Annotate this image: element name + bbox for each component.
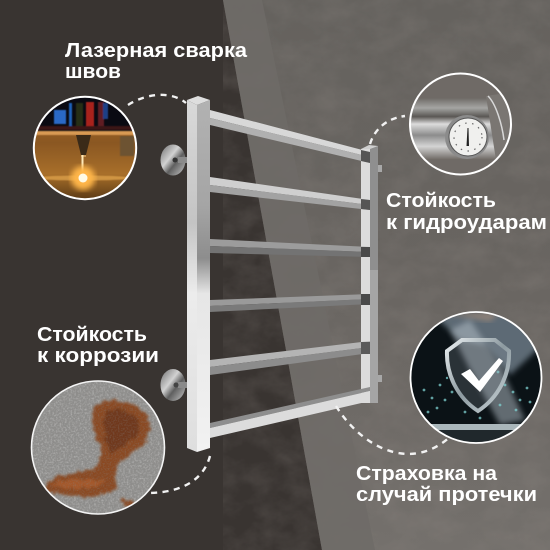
left post [187,96,210,452]
connector: leak insurance [336,406,452,454]
photo circle: gauge on pipe [410,73,512,175]
label: laser welding: Лазерная сварка [65,40,248,62]
wall mount: right studs [377,165,382,382]
rail 6 [210,387,370,438]
label: water hammer resistance: к гидроударам [386,212,547,234]
label: leak insurance: Страховка на [356,463,498,485]
rail 5 [210,341,370,375]
photo circle: rust stain [31,381,165,515]
connector: laser welding [128,95,186,105]
right post [361,145,378,403]
label: leak insurance: случай протечки [356,484,537,506]
towel rail [160,96,382,452]
photo circle: shield insurance [410,312,542,444]
label: laser welding: швов [65,61,121,83]
wall mount: upper left [160,144,187,176]
connector: corrosion [150,456,210,493]
photo circle: laser welding [33,96,137,200]
wall mount: lower left [160,369,187,401]
rail 4 [210,294,370,312]
connector: water hammer [370,116,405,144]
label: water hammer resistance: Стойкость [386,190,496,212]
label: corrosion resistance: Стойкость [37,324,147,346]
data dots [423,371,531,419]
rail 1 [210,110,370,163]
rail 3 [210,239,370,257]
shield [447,340,509,411]
background: concrete wall [223,0,550,550]
rail 2 [210,177,370,210]
label: corrosion resistance: к коррозии [37,345,159,367]
gauge [445,115,489,159]
